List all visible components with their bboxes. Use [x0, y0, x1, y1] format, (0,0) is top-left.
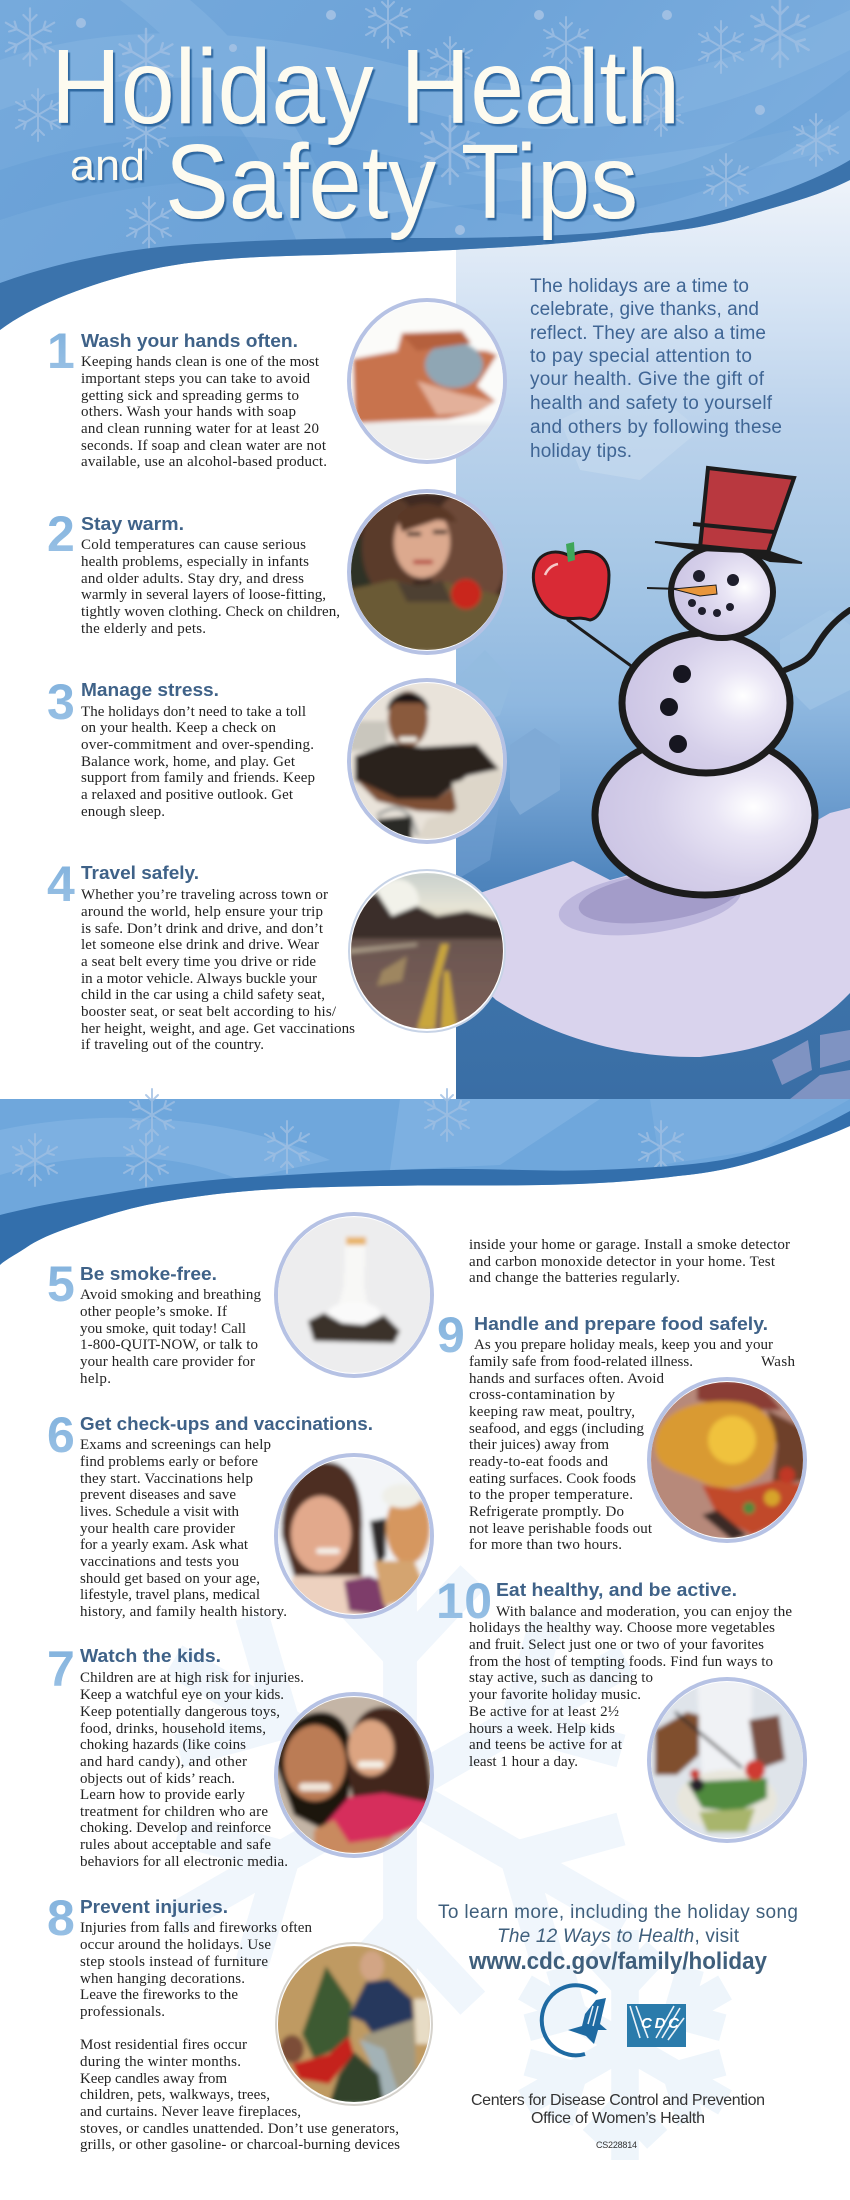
tip 4: travel safely: if traveling out of the country. — [81, 1037, 264, 1053]
panel: bottom section faint snowflakes — [174, 1530, 725, 2160]
snowflakes — [13, 1089, 683, 1186]
tip 3: manage stress: on your health. Keep a check on — [81, 720, 276, 736]
tip 6: check-ups: your health care provider — [80, 1521, 235, 1537]
tip 8: prevent injuries: children, pets, walkways, trees, — [80, 2087, 270, 2103]
panel: mid-page banner — [0, 1089, 850, 1265]
tip 9: handle food safely: their juices) away from — [469, 1437, 609, 1453]
arms — [568, 610, 850, 670]
tip 10: eat healthy: stay active, such as dancing to — [469, 1670, 653, 1686]
tip 7: watch the kids: objects out of kids’ reach. — [80, 1771, 235, 1787]
tip 4: travel safely: 4 — [47, 856, 75, 912]
tip 3: manage stress: 3 — [47, 674, 75, 730]
tip 8: prevent injuries: grills, or other gasoline- or charcoal-burning devices — [80, 2137, 400, 2153]
tip 7: watch the kids: Keep potentially dangerous toys, — [80, 1704, 280, 1720]
tip 8: prevent injuries: and curtains. Never leave fireplaces, — [80, 2104, 301, 2120]
logo: CDC — [627, 2004, 686, 2047]
tip 10: eat healthy: hours a week. Help kids — [469, 1721, 615, 1737]
tip 2: stay warm: the elderly and pets. — [81, 621, 206, 637]
tip 7: watch the kids: treatment for children who are — [80, 1804, 268, 1820]
tip 6: check-ups: lifestyle, travel plans, medical — [80, 1587, 260, 1603]
tip 6: check-ups: find problems early or before — [80, 1454, 258, 1470]
panel background — [456, 165, 850, 1099]
tip 6: check-ups: 6 — [47, 1407, 75, 1463]
apple — [533, 542, 609, 620]
panel: right column with snowman scene — [456, 165, 850, 1099]
head — [671, 546, 773, 638]
tip 7: watch the kids: choking. Develop and reinforce — [80, 1820, 271, 1836]
tip 3: manage stress: Balance work, home, and play. Get — [81, 754, 296, 770]
tip 2: stay warm: tightly woven clothing. Check on children, — [81, 604, 340, 620]
tip 3: manage stress: support from family and friends. Keep — [81, 770, 315, 786]
intro text — [530, 276, 782, 462]
tip 8: prevent injuries: Keep candles away from — [80, 2071, 227, 2087]
face — [647, 570, 739, 617]
tip 8: prevent injuries: when hanging decorations. — [80, 1971, 245, 1987]
buttons — [660, 665, 691, 753]
curved dark band — [0, 160, 850, 330]
tip 4: travel safely: is safe. Don’t drink and drive, and don’t — [81, 921, 324, 937]
tip 10: eat healthy: 10 — [436, 1573, 492, 1629]
footer credits: CS228814 — [596, 2140, 637, 2150]
tip 1: wash hands: available, use an alcohol-based product. — [81, 454, 327, 470]
tip 6: check-ups: lives. Schedule a visit with — [80, 1504, 240, 1520]
tip 9: handle food safely: ready-to-eat foods and — [469, 1454, 608, 1470]
tip 7: watch the kids: rules about acceptable and safe — [80, 1837, 271, 1853]
tip 4: travel safely: around the world, help ensure your trip — [81, 904, 323, 920]
tip 3: manage stress: Manage stress. — [81, 679, 219, 700]
tip 3: manage stress: a relaxed and positive outlook. Get — [81, 787, 294, 803]
tip 6: check-ups — [47, 1407, 373, 1620]
title: and — [70, 141, 145, 190]
tip 1: wash hands: Keeping hands clean is one of the most — [81, 354, 320, 370]
tip 1: wash hands: 1 — [47, 323, 75, 379]
tip 10: eat healthy: With balance and moderation, you can enjoy the — [496, 1604, 792, 1620]
tip 2: stay warm: Stay warm. — [81, 513, 184, 534]
tip 4: travel safely: Travel safely. — [81, 862, 199, 883]
intro text: holiday tips. — [530, 441, 632, 462]
snow hill — [470, 808, 850, 1057]
photo: woman in winter coat — [347, 491, 507, 653]
tip 9: handle food safely: eating surfaces. Cook foods — [469, 1471, 636, 1487]
tip 9: handle food safely: Wash — [761, 1354, 796, 1370]
tip 4: travel safely: let someone else drink and drive. Wear — [81, 937, 319, 953]
tip 8: prevent injuries: Most residential fires occur — [80, 2037, 247, 2053]
tip 1: wash hands: getting sick and spreading germs to — [81, 388, 299, 404]
intro text: reflect. They are also a time — [530, 323, 766, 344]
tip 9: handle food safely: hands and surfaces often. Avoid — [469, 1371, 664, 1387]
tip 5: be smoke-free: Avoid smoking and breathing — [80, 1287, 262, 1303]
call to action: The 12 Ways to Health, visit — [497, 1926, 740, 1947]
curved dark band — [0, 1111, 850, 1265]
tip 9: handle food safely: As you prepare holiday meals, keep you and your — [474, 1337, 773, 1353]
tip 7: watch the kids: Learn how to provide early — [80, 1787, 246, 1803]
title — [51, 28, 680, 241]
tip 9: handle food safely: Refrigerate promptly. Do — [469, 1504, 624, 1520]
tip 3: manage stress: enough sleep. — [81, 804, 165, 820]
tip 8: prevent injuries: stoves, or candles unattended. Don’t use generators, — [80, 2121, 399, 2137]
tip 10: eat healthy: and fruit. Select just one or two of your favorites — [469, 1637, 764, 1653]
photo: roast turkey — [647, 1379, 807, 1541]
tip 8: prevent injuries: professionals. — [80, 2004, 165, 2020]
tip 6: check-ups: they start. Vaccinations help — [80, 1471, 253, 1487]
tip 5: be smoke-free: other people’s smoke. If — [80, 1304, 227, 1320]
tip 1: wash hands: and clean running water for at least 20 — [81, 421, 319, 437]
tip 9: handle food safely: seafood, and eggs (including — [469, 1421, 644, 1437]
tip 9: handle food safely: to the proper temperature. — [469, 1487, 633, 1503]
tip 8: prevent injuries: 8 — [47, 1890, 75, 1946]
tip 1: wash hands: important steps you can take to avoid — [81, 371, 310, 387]
tip 7: watch the kids: 7 — [47, 1641, 75, 1697]
tip 4: travel safely: a seat belt every time you drive or ride — [81, 954, 316, 970]
tip 10: eat healthy: holidays the healthy way. Choose more vegetables — [469, 1620, 775, 1636]
tip 7: watch the kids: and hard candy), and other — [80, 1754, 247, 1770]
intro text: to pay special attention to — [530, 346, 752, 367]
tip 3: manage stress: The holidays don’t need to take a toll — [81, 704, 306, 720]
tip 9: handle food safely: for more than two hours. — [469, 1537, 622, 1553]
title: Holiday Health — [51, 28, 680, 146]
photo: doctor checking girl's ear — [274, 1455, 434, 1617]
tip 6: check-ups: Exams and screenings can help — [80, 1437, 271, 1453]
top hat — [655, 468, 802, 563]
photo: salad on fork — [647, 1679, 807, 1841]
tip 4: travel safely: child in the car using a child safety seat, — [81, 987, 325, 1003]
footer credits — [471, 2092, 765, 2150]
tip 10: eat healthy: Eat healthy, and be active. — [496, 1579, 737, 1600]
tip 2: stay warm: 2 — [47, 506, 75, 562]
panel: top header banner — [0, 0, 850, 330]
tip 6: check-ups: for a yearly exam. Ask what — [80, 1537, 249, 1553]
tip 7: watch the kids: choking hazards (like coins — [80, 1737, 246, 1753]
tip 10: eat healthy — [436, 1573, 792, 1770]
tip 8: prevent injuries: step stools instead of furniture — [80, 1954, 268, 1970]
tip 10: eat healthy: and teens be active for at — [469, 1737, 623, 1753]
tip 2: stay warm: Cold temperatures can cause serious — [81, 537, 306, 553]
tip 8: prevent injuries: Leave the fireworks to the — [80, 1987, 238, 2003]
title: Safety Tips — [165, 123, 638, 241]
tip 5: be smoke-free: 5 — [47, 1256, 75, 1312]
tip 10: eat healthy: least 1 hour a day. — [469, 1754, 578, 1770]
tip 7: watch the kids: Keep a watchful eye on your kids. — [80, 1687, 284, 1703]
call to action: www.cdc.gov/family/holiday — [468, 1948, 768, 1975]
faint snowflake cells — [456, 380, 850, 1099]
tip 7: watch the kids — [47, 1641, 304, 1870]
intro text: your health. Give the gift of — [530, 369, 765, 390]
tip 7: watch the kids: behaviors for all electronic media. — [80, 1854, 288, 1870]
logo: HHS eagle — [542, 1985, 607, 2055]
tip 1: wash hands — [47, 323, 327, 470]
tip 9: handle food safely: Handle and prepare food safely. — [474, 1313, 768, 1334]
tip 6: check-ups: history, and family health history. — [80, 1604, 287, 1620]
tip 5: be smoke-free: Be smoke-free. — [80, 1263, 217, 1284]
tip 7: watch the kids: food, drinks, household items, — [80, 1721, 266, 1737]
tip 5: be smoke-free: 1-800-QUIT-NOW, or talk to — [80, 1337, 258, 1353]
footer credits: Centers for Disease Control and Prevention — [471, 2092, 765, 2109]
tip 7: watch the kids: Watch the kids. — [80, 1645, 221, 1666]
tip 1: wash hands: others. Wash your hands with soap — [81, 404, 296, 420]
footer credits: Office of Women’s Health — [531, 2110, 705, 2127]
photo: road at sunset — [347, 870, 507, 1032]
tip 6: check-ups: should get based on your age, — [80, 1571, 260, 1587]
tip 2: stay warm: health problems, especially in infants — [81, 554, 309, 570]
photo: man decorating tree — [274, 1943, 434, 2105]
tip 9: handle food safely: cross-contamination by — [469, 1387, 616, 1403]
call to action: To learn more, including the holiday song — [438, 1902, 798, 1923]
tip 9: handle food safely: not leave perishable foods out — [469, 1521, 653, 1537]
tip 9: handle food safely: family safe from food-related illness. — [469, 1354, 693, 1370]
banner bands — [0, 1099, 850, 1180]
tip 4: travel safely — [47, 856, 355, 1053]
tip 8 continued (right column): inside your home or garage. Install a smoke detector — [469, 1237, 790, 1253]
tip 4: travel safely: her height, weight, and age. Get vaccinations — [81, 1021, 355, 1037]
tip 9: handle food safely — [437, 1307, 796, 1553]
tip 1: wash hands: Wash your hands often. — [81, 330, 298, 351]
photo: stubbed cigarette — [274, 1214, 434, 1376]
tip 5: be smoke-free — [47, 1256, 262, 1387]
tip 3: manage stress: over-commitment and over-spending. — [81, 737, 314, 753]
intro text: health and safety to yourself — [530, 393, 773, 414]
tip 6: check-ups: Get check-ups and vaccinations. — [80, 1413, 373, 1434]
photo: man in wheelchair — [347, 680, 507, 842]
logo: CDC: CDC — [641, 2015, 680, 2032]
photo: hands with soap — [347, 300, 507, 463]
tip 6: check-ups: prevent diseases and save — [80, 1487, 236, 1503]
tip 9: handle food safely: 9 — [437, 1307, 465, 1363]
tip 4: travel safely: booster seat, or seat belt according to his/ — [81, 1004, 337, 1020]
tip 8: prevent injuries: Injuries from falls and fireworks often — [80, 1920, 312, 1936]
tip 8: prevent injuries: occur around the holidays. Use — [80, 1937, 271, 1953]
tip 4: travel safely: Whether you’re traveling across town or — [81, 887, 328, 903]
intro text: and others by following these — [530, 417, 782, 438]
tip 10: eat healthy: from the host of tempting foods. Find fun ways to — [469, 1654, 773, 1670]
tip 3: manage stress — [47, 674, 315, 820]
tip 1: wash hands: seconds. If soap and clean water are not — [81, 438, 327, 454]
tip 4: travel safely: in a motor vehicle. Always buckle your — [81, 971, 317, 987]
tip 8: prevent injuries: Prevent injuries. — [80, 1896, 228, 1917]
tip 8: prevent injuries: during the winter months. — [80, 2054, 241, 2070]
tip 8 continued (right column): and carbon monoxide detector in your home. Test — [469, 1254, 776, 1270]
tip 5: be smoke-free: your health care provider for — [80, 1354, 255, 1370]
tip 9: handle food safely: keeping raw meat, poultry, — [469, 1404, 635, 1420]
bottom ball — [595, 735, 815, 895]
call to action — [438, 1902, 798, 1975]
tip 10: eat healthy: your favorite holiday music. — [469, 1687, 641, 1703]
snowflakes — [6, 0, 838, 249]
tip 2: stay warm: warmly in several layers of loose-fitting, — [81, 587, 326, 603]
photo: mother and daughter — [274, 1694, 434, 1856]
tip 8: prevent injuries — [47, 1890, 400, 2153]
tip 8 continued (right column): and change the batteries regularly. — [469, 1270, 680, 1286]
tip 7: watch the kids: Children are at high risk for injuries. — [80, 1670, 304, 1686]
tip 2: stay warm: and older adults. Stay dry, and dress — [81, 571, 304, 587]
tip 2: stay warm — [47, 506, 340, 637]
tip 6: check-ups: vaccinations and tests you — [80, 1554, 240, 1570]
tip 10: eat healthy: Be active for at least 2½ — [469, 1704, 619, 1720]
tip 5: be smoke-free: help. — [80, 1371, 111, 1387]
wavy banner bands — [0, 0, 850, 250]
tip 5: be smoke-free: you smoke, quit today! Call — [80, 1321, 246, 1337]
intro text: The holidays are a time to — [530, 276, 749, 297]
intro text: celebrate, give thanks, and — [530, 299, 759, 320]
snowman shadow — [555, 860, 745, 946]
tip 8 continued (right column) — [469, 1237, 790, 1286]
middle ball — [622, 633, 790, 773]
snowman — [568, 468, 850, 895]
